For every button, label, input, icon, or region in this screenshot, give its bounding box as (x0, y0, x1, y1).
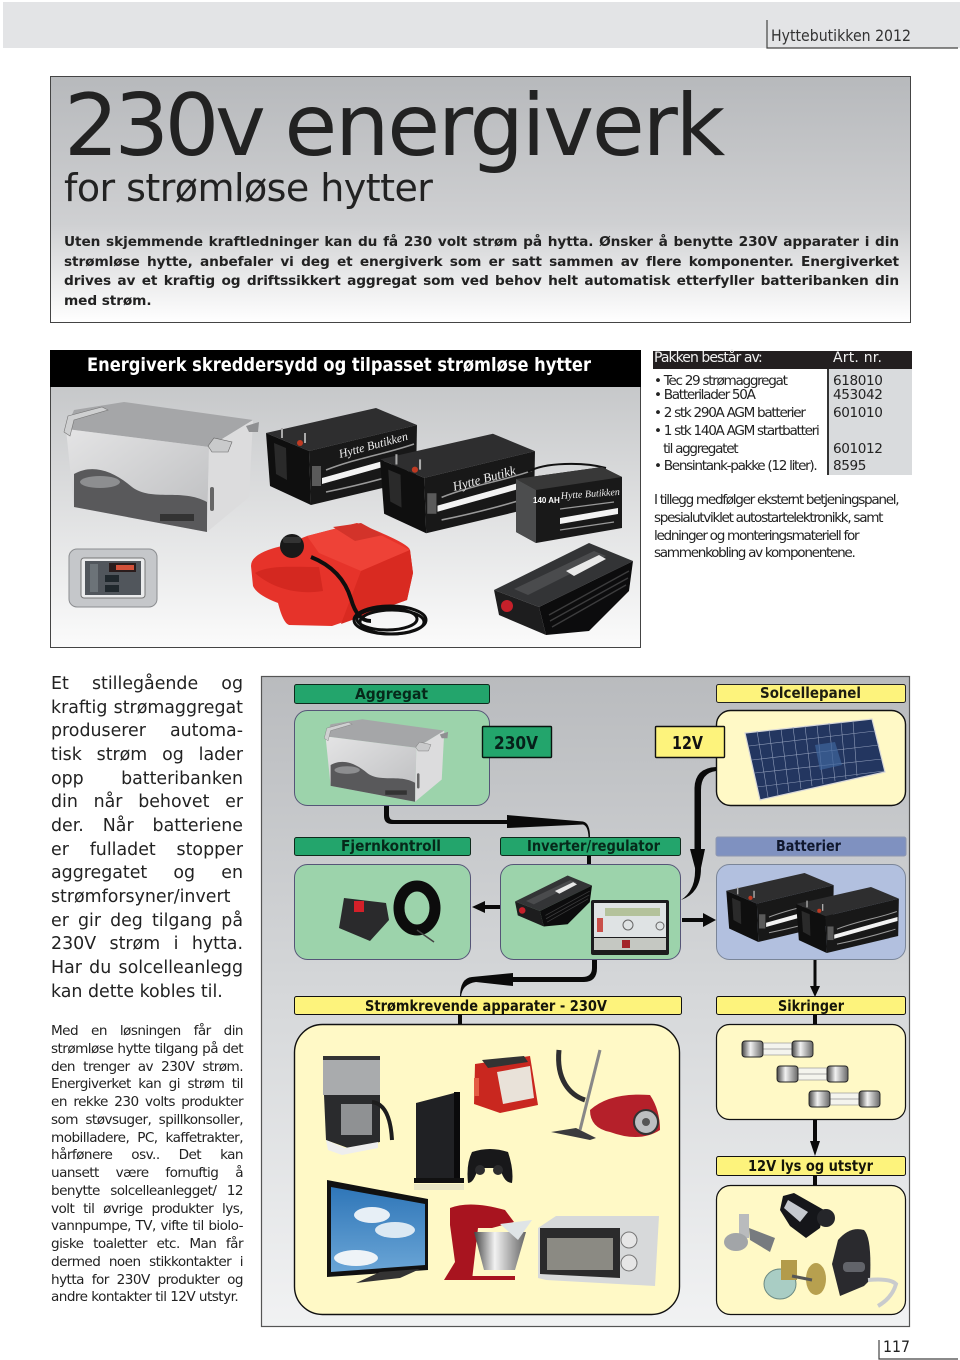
page number: 117 (883, 1337, 910, 1356)
left text: usage description: Med en løsningen får din (51, 1023, 243, 1039)
badge: 230V (482, 726, 552, 758)
icon: generator (64, 402, 259, 532)
left text: usage description: den trenger av 230V strøm. (51, 1058, 243, 1074)
label: Fjernkontroll (294, 837, 470, 856)
panel: Sikringer (716, 1024, 906, 1120)
label: Aggregat (294, 684, 490, 704)
left text: usage description: som støvsuger, spillkonsoller, (51, 1112, 243, 1128)
left text: usage description: benytte solcelleanlegget/ 12 (51, 1183, 243, 1199)
label: Aggregat: Aggregat (355, 685, 428, 703)
left text: generator description: strømforsyner/invert (51, 887, 230, 907)
icon: control panel (69, 549, 157, 607)
table: package contents: 601012 (833, 441, 882, 457)
table: package contents: 618010 (833, 373, 882, 389)
header band: Hyttebutikken 2012 (771, 26, 911, 45)
table: package contents: 601010 (833, 405, 882, 421)
connectors (458, 856, 817, 1185)
badge: 12V: 12V (672, 733, 703, 754)
left text: usage description: andre kontakter til 12V utstyr. (51, 1289, 238, 1305)
panel: Batterier (716, 864, 906, 960)
arrow: aggregat to inverter (384, 806, 590, 837)
left text: usage description: uansett være fornuftig å (51, 1165, 243, 1181)
left text: generator description: kraftig strømaggregat (51, 698, 243, 718)
left text: usage description: hytta for 230V produkter og (51, 1272, 243, 1288)
panel: Aggregat (294, 710, 490, 806)
icon: start battery: Hytte Butikken (559, 487, 620, 502)
icon: spot lamp (724, 1214, 775, 1252)
heading: product photo: Energiverk skreddersydd og tilpasset strømløse hytter (87, 354, 592, 376)
icon: brass lamps (764, 1260, 826, 1299)
icon: fuel tank (251, 523, 426, 634)
left text: usage description: vannpumpe, TV, vifte til biolo- (51, 1218, 243, 1234)
page number (879, 1337, 958, 1359)
label: Sikringer: Sikringer (778, 997, 845, 1015)
table header: Pakken består av: (654, 350, 762, 366)
table header: Art. nr. (833, 350, 882, 366)
panel: Fjernkontroll (294, 864, 470, 960)
left text: generator description: er gir deg tilgang på (51, 911, 243, 931)
left text: generator description (51, 673, 244, 1002)
left text: generator description: er fulladet stopper (51, 840, 243, 860)
icon: inverter (494, 543, 633, 635)
label: Fjernkontroll: Fjernkontroll (341, 837, 441, 855)
subtitle: for strømløse hytter (64, 166, 432, 210)
icon: vacuum cleaner (551, 1050, 660, 1140)
intro text (64, 234, 899, 309)
left text: usage description: mobilladere, PC, kaffetrakter, (51, 1130, 243, 1146)
label: Batterier (716, 837, 906, 856)
left text: generator description: der. Når batteriene (51, 816, 243, 836)
package note: ledninger og monteringsmateriell for (654, 528, 858, 544)
left text: usage description: en rekke 230 volts produkter (51, 1094, 243, 1110)
left text: generator description: tisk strøm og lader (51, 745, 243, 765)
arrow: fuses to 12V (810, 1119, 820, 1156)
icon: regulator (591, 900, 669, 955)
label: Batterier: Batterier (776, 837, 842, 855)
badge: 230V: 230V (494, 733, 538, 754)
left text: usage description: volt til øvrige produkter lys, (51, 1200, 243, 1216)
left text: generator description: Et stillegående og (51, 674, 243, 694)
table: package contents: • Bensintank-pakke (12 liter). (654, 458, 816, 474)
intro text: strømløse hytte, anbefaler vi deg et energiverk som er satt sammen av flere komponenter. Energiverket (64, 254, 899, 270)
icon: cable coil (399, 886, 435, 942)
arrow: batteries to fuses (810, 960, 820, 997)
icon: microwave (538, 1216, 659, 1286)
table: package contents: til aggregatet (663, 441, 737, 457)
icon: game controller (468, 1149, 512, 1183)
panel: Inverter/regulator (500, 864, 680, 960)
left text: generator description: Har du solcelleanlegg (51, 958, 243, 978)
icon: start battery: 140 AH (533, 496, 560, 505)
icon: water pump (780, 1193, 835, 1238)
label: Sikringer (716, 996, 906, 1015)
intro text: med strøm. (64, 293, 151, 309)
icon: battery 2: Hytte Butikk (450, 463, 517, 494)
left text: generator description: 230V strøm i hytta. (51, 934, 243, 954)
panel: Solcellepanel (716, 710, 906, 806)
left text: generator description: kan dette kobles til. (51, 982, 223, 1002)
arrow: inverter to remote (472, 901, 500, 913)
package note: sammenkobling av komponentene. (654, 545, 855, 561)
label: Solcellepanel (716, 684, 906, 702)
arrow: inverter to batteries (682, 913, 716, 927)
icon: toaster (474, 1056, 538, 1113)
label: Strømkrevende apparater - 230V: Strømkrevende apparater - 230V (365, 997, 607, 1015)
table: package contents: 453042 (833, 387, 882, 403)
icon: coffee maker (323, 1056, 392, 1155)
panel: system diagram (262, 676, 910, 1326)
intro text: Uten skjemmende kraftledninger kan du få 230 volt strøm på hytta. Ønsker å benytte 230V apparater i din (64, 234, 899, 250)
table: package contents (654, 349, 882, 474)
left text: usage description: strømløse hytte tilgang på det (51, 1041, 243, 1057)
icon: television (327, 1180, 428, 1283)
table rows (654, 373, 882, 389)
label: Solcellepanel: Solcellepanel (760, 684, 861, 702)
header band (3, 2, 960, 48)
panel: title background (50, 76, 910, 322)
icon: stand mixer (444, 1204, 532, 1280)
left text: usage description (51, 1023, 244, 1305)
package note: spesialutviklet autostartelektronikk, samt (654, 510, 882, 526)
left text: usage description: Energiverket kan gi strøm til (51, 1076, 243, 1092)
icon: battery 2 (380, 434, 535, 533)
table: package contents: 8595 (833, 458, 866, 474)
icon: portable vacuum (832, 1229, 896, 1306)
badge: 12V (656, 726, 724, 758)
icon: start battery (516, 464, 622, 543)
label: 12V lys og utstyr: 12V lys og utstyr (748, 1157, 874, 1175)
panel: product photo (50, 350, 641, 648)
package note: I tillegg medfølger eksternt betjeningspanel, (654, 492, 898, 508)
left text: usage description: hårfønere osv.. Det kan (51, 1147, 243, 1163)
icon: solar panel (745, 719, 885, 800)
arrow: solar to inverter (681, 767, 716, 900)
left text: generator description: produserer automa- (51, 721, 243, 741)
package note (654, 492, 898, 561)
intro text: drives av et kraftig og driftssikkert aggregat som ved behov helt automatisk etterfyller batteribanken din (64, 273, 899, 289)
left text: generator description: din når behovet er (51, 792, 243, 812)
icon: battery 1 (266, 408, 417, 505)
panel: 12V lys og utstyr (716, 1186, 906, 1314)
arrow: inverter to appliances (460, 960, 597, 997)
table: package contents background (653, 351, 912, 475)
icon: battery 1: Hytte Butikken (336, 429, 409, 461)
left text: generator description: aggregatet og en (51, 863, 243, 883)
table rows: • Tec 29 strømaggregat (654, 373, 787, 389)
icon: remote (339, 898, 389, 941)
table: package contents: • 2 stk 290A AGM batterier (654, 405, 805, 421)
table: package contents: • Batterilader 50A (654, 387, 755, 403)
left text: generator description: opp batteribanken (51, 769, 243, 789)
icon: game console (414, 1092, 464, 1190)
panel: appliances (294, 1024, 680, 1314)
title: 230v energiverk (64, 76, 723, 176)
label: Inverter/regulator: Inverter/regulator (527, 837, 661, 855)
left text: usage description: giske toaletter etc. Man får (51, 1236, 243, 1252)
table: package contents: • 1 stk 140A AGM startbatteri (654, 423, 818, 439)
left text: usage description: dermed noen stikkontakter i (51, 1254, 243, 1270)
table header (654, 349, 882, 366)
